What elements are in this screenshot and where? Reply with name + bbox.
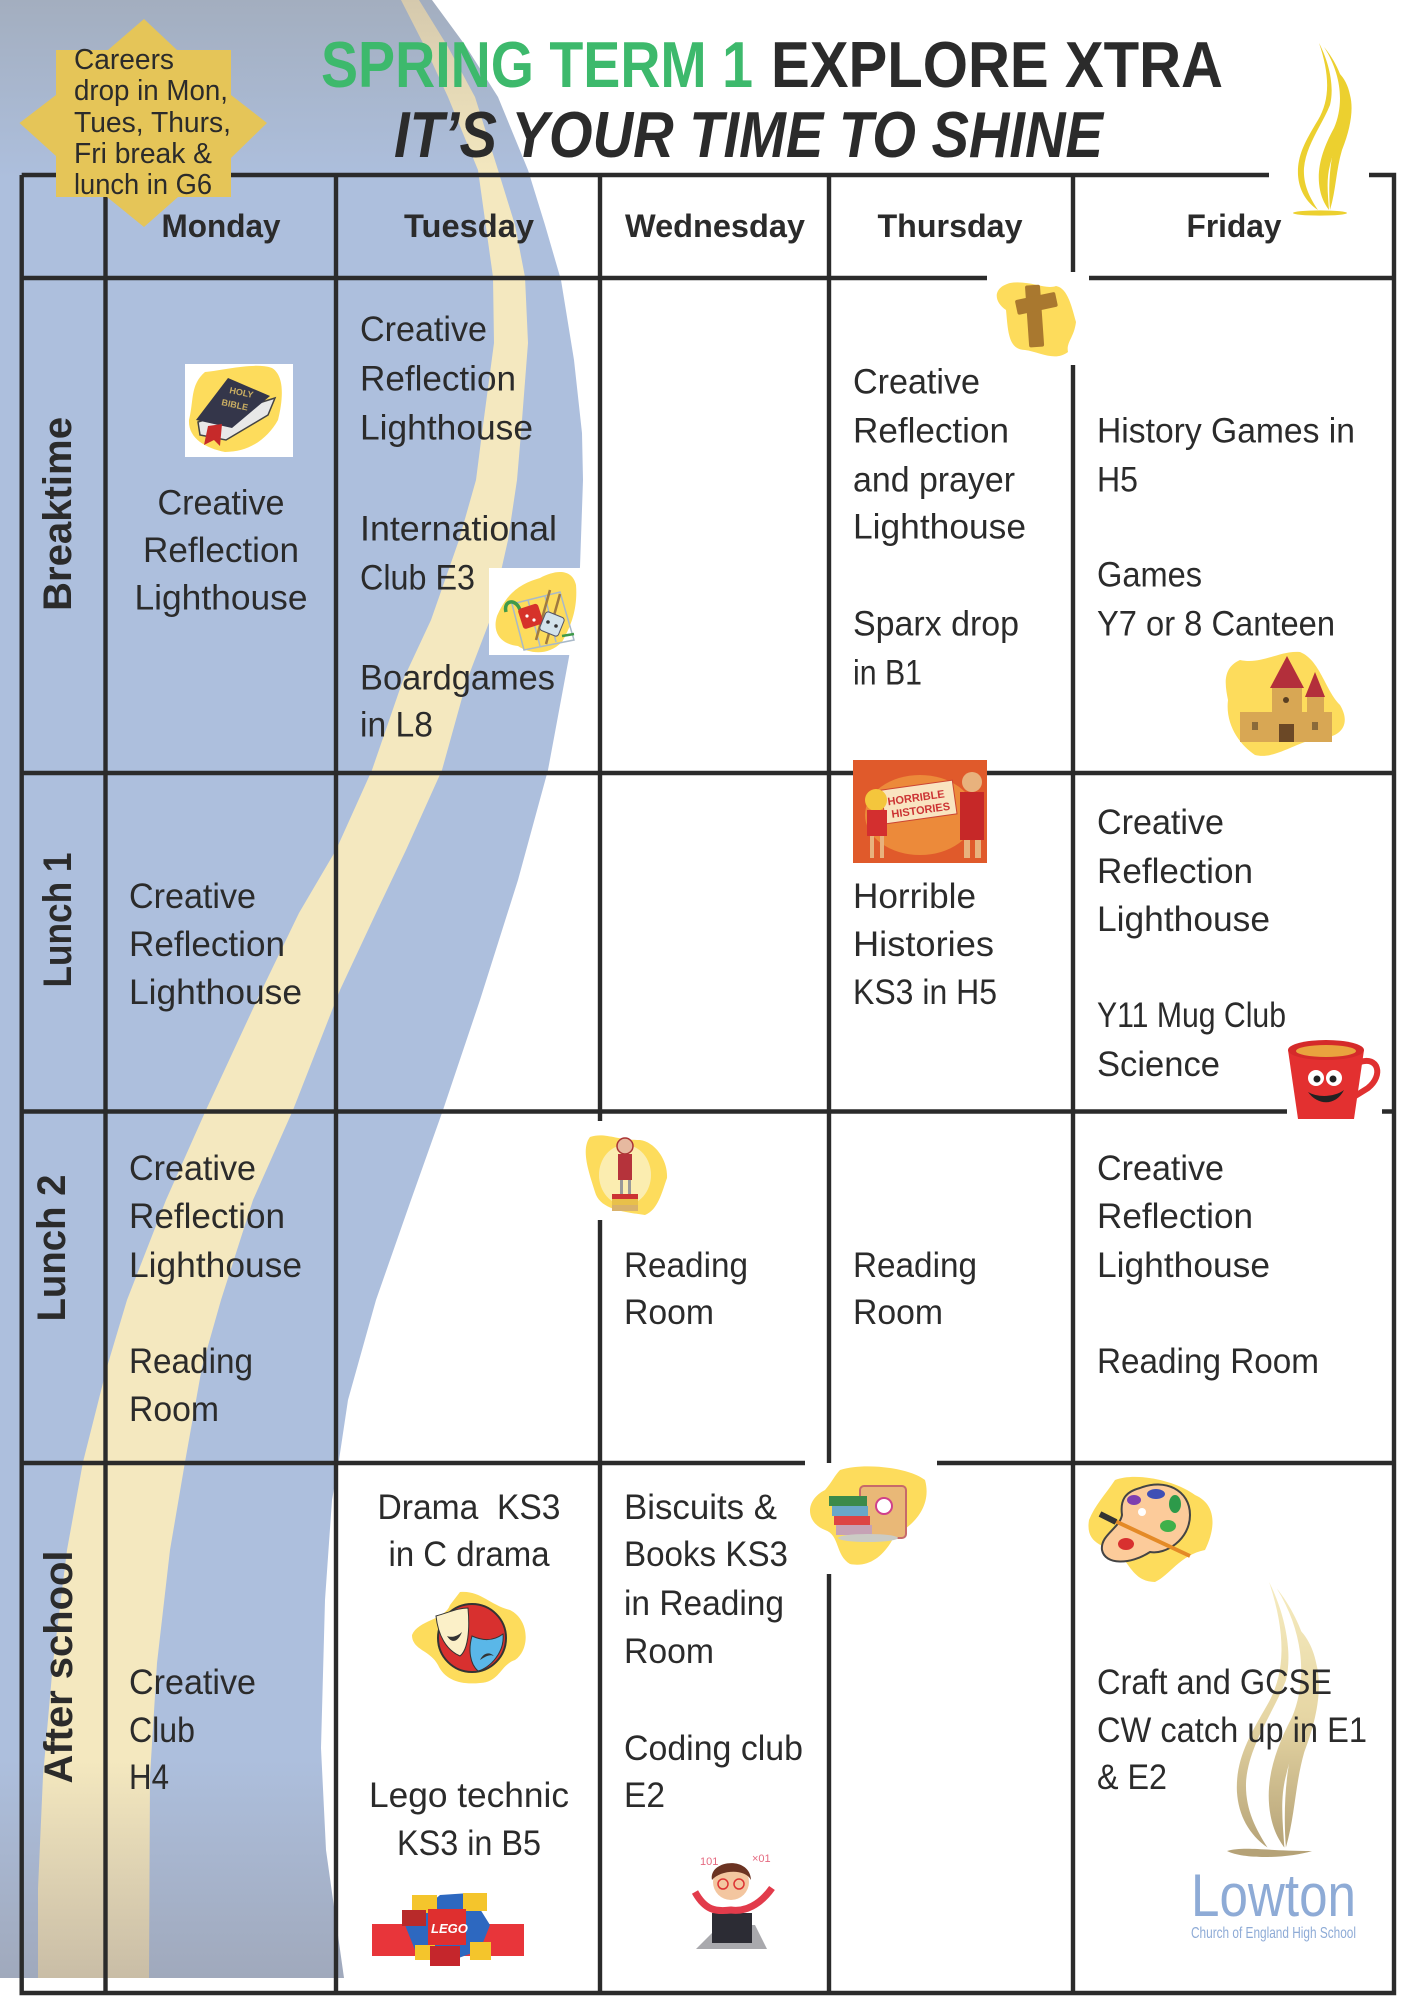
Friday activities: Y7 or 8 Canteen <box>1097 604 1335 644</box>
Thursday activities: Histories <box>853 925 994 964</box>
icon: watermark flame <box>1227 1582 1319 1857</box>
note: careers drop-in: Careers <box>74 44 174 76</box>
Friday activities: Lighthouse <box>1097 900 1270 939</box>
Monday activities: Reflection <box>143 531 299 570</box>
Monday activities: Creative <box>158 484 284 522</box>
Monday activities: Lighthouse <box>129 973 302 1012</box>
Monday activities: Lighthouse <box>134 578 308 618</box>
row headings <box>30 417 81 1784</box>
icon: coder with laptop: 101 <box>700 1856 718 1868</box>
Wednesday activities <box>624 1246 803 1815</box>
Monday activities: H4 <box>129 1758 169 1797</box>
school logo: Church of England High School <box>1191 1925 1356 1942</box>
Thursday activities: KS3 in H5 <box>853 973 997 1012</box>
day headings: Tuesday <box>404 208 534 244</box>
background swoosh <box>0 0 583 1978</box>
icon: lego: LEGO <box>431 1921 468 1936</box>
icon: coder with laptop <box>695 1853 772 1949</box>
Thursday activities: Lighthouse <box>853 508 1026 546</box>
title: EXPLORE XTRA <box>771 28 1223 101</box>
icon: top flame <box>1293 43 1352 216</box>
Tuesday activities: in L8 <box>360 706 433 744</box>
Wednesday activities: Coding club <box>624 1729 803 1768</box>
icon: mug <box>1287 1038 1382 1120</box>
Monday activities: Creative <box>129 1149 256 1188</box>
Friday activities: Games <box>1097 556 1202 594</box>
note: careers drop-in <box>20 19 267 227</box>
Tuesday activities: International <box>360 510 557 548</box>
Thursday activities <box>853 362 1026 1332</box>
Wednesday activities: E2 <box>624 1776 665 1815</box>
Tuesday activities <box>360 310 569 1863</box>
Thursday activities: Horrible <box>853 877 976 916</box>
Friday activities: Reflection <box>1097 1197 1253 1236</box>
Monday activities: Lighthouse <box>129 1246 302 1285</box>
Monday activities: Reflection <box>129 925 285 964</box>
Friday activities: Reflection <box>1097 852 1253 891</box>
Friday activities: Reading Room <box>1097 1342 1319 1381</box>
Wednesday activities: in Reading <box>624 1584 784 1623</box>
icon: theatre masks <box>412 1592 526 1683</box>
icon: biscuits and books <box>810 1466 927 1565</box>
icon: coder with laptop: ×01 <box>752 1853 771 1865</box>
note: careers drop-in: Fri break & <box>74 138 212 170</box>
day headings <box>162 208 1282 244</box>
Tuesday activities: KS3 in B5 <box>397 1824 541 1863</box>
day headings: Thursday <box>878 208 1023 244</box>
icon: castle <box>1226 652 1345 756</box>
Friday activities: History Games in <box>1097 412 1355 450</box>
Wednesday activities: Reading <box>624 1246 748 1285</box>
title: IT’S YOUR TIME TO SHINE <box>394 98 1104 171</box>
Thursday activities: Sparx drop <box>853 604 1019 644</box>
Friday activities: & E2 <box>1097 1758 1167 1797</box>
note: careers drop-in: drop in Mon, <box>74 75 228 107</box>
icon: bible <box>185 364 293 457</box>
Friday activities: Science <box>1097 1045 1220 1084</box>
icon: Horrible Histories poster: HISTORIES <box>891 801 951 821</box>
title: SPRING TERM 1 <box>321 28 753 101</box>
Wednesday activities: Biscuits & <box>624 1488 777 1527</box>
Wednesday activities: Books KS3 <box>624 1535 788 1574</box>
row headings: Lunch 1 <box>36 852 80 988</box>
Thursday activities: Creative <box>853 362 980 402</box>
icon: Horrible Histories poster: HORRIBLE <box>887 788 945 808</box>
icon: bible: BIBLE <box>221 397 249 413</box>
Friday activities: H5 <box>1097 460 1138 500</box>
row headings: Breaktime <box>36 417 80 611</box>
note: careers drop-in: Tues, Thurs, <box>74 107 231 139</box>
note: careers drop-in: lunch in G6 <box>74 169 212 201</box>
icon: paint palette <box>1088 1477 1213 1582</box>
Friday activities: Y11 Mug Club <box>1097 996 1286 1035</box>
Tuesday activities: Boardgames <box>360 658 555 698</box>
Friday activities: Lighthouse <box>1097 1246 1270 1285</box>
Monday activities: Reflection <box>129 1197 285 1236</box>
Wednesday activities: Room <box>624 1293 714 1332</box>
title <box>321 28 1223 171</box>
day headings: Friday <box>1186 208 1282 244</box>
day headings: Wednesday <box>625 208 805 244</box>
Tuesday activities: Creative <box>360 310 487 349</box>
Monday activities: Creative <box>129 877 256 916</box>
Thursday activities: Reflection <box>853 412 1009 450</box>
Monday activities: Reading <box>129 1342 253 1381</box>
Tuesday activities: Drama KS3 <box>378 1488 560 1527</box>
school logo: Lowton <box>1191 1862 1356 1929</box>
Monday activities <box>129 484 308 1797</box>
Tuesday activities: Lighthouse <box>360 408 533 448</box>
icon: cross <box>997 282 1076 356</box>
icon: board games dice <box>489 568 580 655</box>
Thursday activities: Reading <box>853 1246 977 1285</box>
Thursday activities: and prayer <box>853 460 1015 500</box>
Thursday activities: in B1 <box>853 654 922 692</box>
Tuesday activities: Club E3 <box>360 558 475 598</box>
icon: lego <box>372 1893 524 1966</box>
icon: Shakespeare on books <box>586 1135 667 1215</box>
icon: Horrible Histories poster <box>853 760 987 863</box>
Monday activities: Creative <box>129 1663 256 1702</box>
Tuesday activities: Reflection <box>360 360 516 398</box>
icon: bible: HOLY <box>229 385 254 400</box>
row headings: Lunch 2 <box>30 1174 74 1322</box>
Friday activities: Craft and GCSE <box>1097 1663 1332 1702</box>
Friday activities: CW catch up in E1 <box>1097 1711 1367 1750</box>
Wednesday activities: Room <box>624 1632 714 1671</box>
Thursday activities: Room <box>853 1293 943 1332</box>
row headings: After school <box>37 1550 81 1784</box>
Friday activities: Creative <box>1097 803 1224 842</box>
Monday activities: Club <box>129 1711 195 1750</box>
Monday activities: Room <box>129 1390 219 1429</box>
Friday activities <box>1097 412 1367 1797</box>
Tuesday activities: in C drama <box>388 1535 550 1574</box>
Friday activities: Creative <box>1097 1149 1224 1188</box>
Tuesday activities: Lego technic <box>369 1776 569 1815</box>
day headings: Monday <box>162 208 281 244</box>
